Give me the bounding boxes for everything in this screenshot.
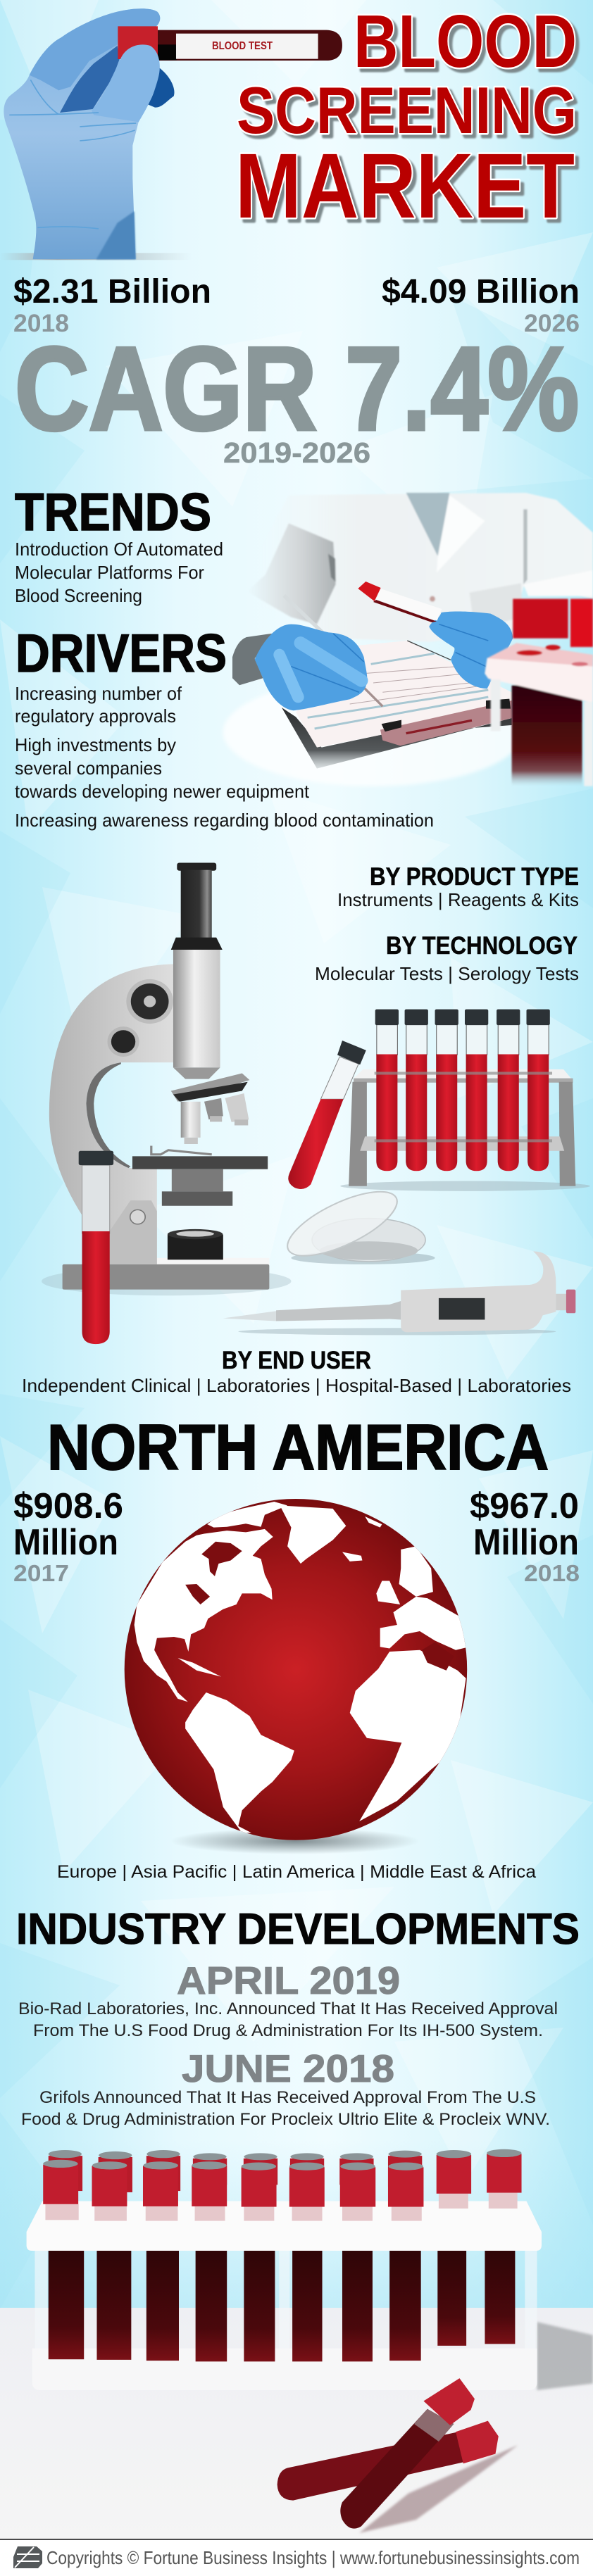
- heading: trends: TRENDS: [15, 482, 211, 541]
- illustration: microscope: [42, 863, 291, 1344]
- tube 5: [497, 1010, 520, 1171]
- development: june 2018: [21, 2047, 550, 2129]
- stat: 2018 value: $967.0: [470, 1485, 579, 1526]
- lab coat: [246, 493, 593, 642]
- tube 4: [465, 1010, 488, 1171]
- pen: [284, 596, 382, 706]
- globe sphere: [125, 1499, 467, 1840]
- cuff: [232, 632, 280, 685]
- right glove: [429, 612, 513, 689]
- right glove folds: [439, 624, 488, 667]
- rack shadow: [537, 2322, 593, 2390]
- stat: 2017 value: [13, 1485, 123, 1586]
- tilted tube: [288, 1041, 366, 1189]
- trends text: [15, 539, 223, 606]
- back row caps: [49, 2150, 422, 2192]
- stat: 2017 value: 2017: [13, 1560, 69, 1586]
- glove body: [4, 8, 160, 259]
- clipboard: [282, 708, 512, 769]
- drivers text: towards developing newer equipment: [15, 781, 310, 802]
- form lines: [308, 653, 488, 729]
- thumb: [92, 44, 160, 122]
- development: june 2018: Grifols Announced That It Has Received Approval From The U.S: [39, 2088, 536, 2107]
- rack legs: [35, 2249, 537, 2349]
- rack frame: [340, 1069, 590, 1191]
- floor shadow under glove: [0, 253, 192, 260]
- clip: [380, 699, 512, 746]
- diagonal tube: [340, 2378, 475, 2529]
- arm hinge: [110, 1200, 157, 1264]
- stat: 2018 value: [470, 1485, 580, 1586]
- drivers text: several companies: [15, 758, 162, 779]
- development: april 2019: [18, 1959, 558, 2040]
- stat: 2017 value: Million: [13, 1522, 118, 1563]
- tube 3: [435, 1010, 458, 1171]
- drivers text: Increasing number of: [15, 683, 182, 704]
- drivers text: [15, 683, 434, 831]
- blood tube beside microscope: [79, 1151, 113, 1344]
- trends text: Molecular Platforms For: [15, 562, 204, 583]
- tube label text: BLOOD TEST: [212, 40, 273, 52]
- fingers: [30, 8, 160, 90]
- glove lower shadow: [96, 211, 136, 259]
- palm shadow: [60, 46, 120, 113]
- focus knobs: [108, 979, 173, 1057]
- photo: vial rack: [27, 2149, 593, 2390]
- trends text: Blood Screening: [15, 585, 142, 606]
- stage: [132, 1146, 268, 1206]
- other regions: Europe | Asia Pacific | Latin America | Middle East & Africa: [57, 1862, 536, 1882]
- development: april 2019: APRIL 2019: [177, 1959, 400, 2002]
- tube shadow: [359, 2445, 518, 2533]
- stat: CAGR: 2019-2026: [223, 436, 370, 469]
- left glove highlights: [280, 634, 364, 697]
- stat: 2026 value: $4.09 Billion: [382, 273, 580, 310]
- illustration: test tube rack: [288, 1010, 590, 1191]
- hudson bay and lakes: [185, 1542, 454, 1671]
- title: [235, 0, 577, 237]
- clipboard paper: [296, 641, 512, 748]
- rack top: [27, 2201, 542, 2251]
- product type items: Instruments | Reagents & Kits: [337, 889, 579, 910]
- stat: 2018 value: $2.31 Billion: [13, 273, 211, 310]
- white table glow: [223, 678, 523, 786]
- tube 2: [405, 1010, 428, 1171]
- globe shadow: [170, 1828, 420, 1854]
- illustration: gloved hand holding blood test tube: [0, 8, 342, 260]
- heading: north america: NORTH AMERICA: [47, 1412, 549, 1483]
- heading: by end user: BY END USER: [222, 1347, 371, 1374]
- objective turret: [171, 1073, 249, 1144]
- drivers text: Increasing awareness regarding blood contamination: [15, 810, 434, 831]
- horizontal tube: [277, 2421, 499, 2501]
- development: april 2019: Bio-Rad Laboratories, Inc. Announced That It Has Received Approval: [18, 1999, 558, 2018]
- blood test tube: [118, 26, 342, 61]
- end user items: Independent Clinical | Laboratories | Hospital-Based | Laboratories: [22, 1375, 571, 1396]
- front row caps: [43, 2149, 522, 2207]
- glove crease lines: [9, 80, 136, 229]
- globe: [125, 1499, 469, 1854]
- microscope base: [42, 1258, 291, 1295]
- stat: 2026 value: 2026: [524, 310, 580, 337]
- rack with blood tubes: [485, 599, 593, 786]
- photo: loose blood tubes: [277, 2378, 518, 2533]
- vial bodies: [49, 2251, 515, 2361]
- eyepiece: [171, 863, 223, 950]
- stat: 2018 value: Million: [473, 1522, 579, 1563]
- continents: [135, 1502, 469, 1833]
- rack shelf bars over tubes: [375, 1072, 552, 1142]
- development: april 2019: From The U.S Food Drug & Administration For Its IH-500 System.: [33, 2021, 543, 2040]
- tube 1: [375, 1010, 399, 1171]
- body tube: [173, 950, 220, 1079]
- trends text: Introduction Of Automated: [15, 539, 223, 560]
- clipboard edge: [407, 641, 451, 660]
- microscope arm: [49, 964, 174, 1264]
- footer: [0, 2539, 593, 2576]
- stat: 2026 value: [382, 273, 580, 337]
- photo: lab technician with clipboard and blood tubes: [223, 493, 593, 786]
- left glove: [255, 624, 367, 710]
- hand-held tube: [358, 582, 442, 622]
- table surface: [0, 2308, 593, 2539]
- rack base: [32, 2349, 537, 2390]
- stat: 2018 value: 2018: [524, 1560, 580, 1586]
- development: june 2018: JUNE 2018: [182, 2047, 394, 2090]
- vial glass necks: [45, 2193, 518, 2221]
- logo: [13, 2546, 42, 2568]
- development: june 2018: Food & Drug Administration For Procleix Ultrio Elite & Procleix WNV.: [21, 2110, 550, 2129]
- stat: 2018 value: [13, 273, 211, 337]
- far finger: [148, 68, 174, 108]
- technology items: Molecular Tests | Serology Tests: [315, 963, 579, 984]
- drivers text: regulatory approvals: [15, 705, 176, 727]
- illustration: pipette: [223, 1252, 575, 1335]
- stat: 2017 value: $908.6: [13, 1485, 123, 1526]
- illustration: petri dish: [278, 1179, 435, 1269]
- heading: industry developments: INDUSTRY DEVELOPMENTS: [16, 1905, 580, 1954]
- stat: 2018 value: 2018: [13, 310, 69, 337]
- heading: drivers: DRIVERS: [15, 624, 227, 684]
- drivers text: High investments by: [15, 734, 176, 755]
- lamp: [168, 1229, 223, 1259]
- tube 6: [527, 1010, 550, 1171]
